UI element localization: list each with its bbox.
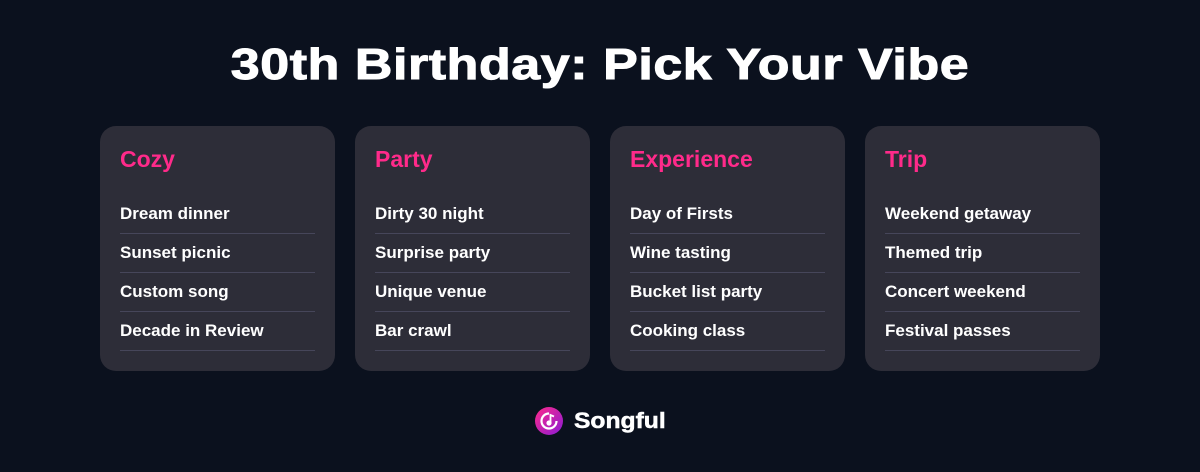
panel: experience: Wine tasting: [630, 243, 731, 262]
panel: cozy: Custom song: [120, 282, 229, 301]
title: 30th Birthday: Pick Your Vibe: [231, 40, 969, 89]
panel: cozy: Dream dinner: [120, 204, 230, 223]
panel: trip: Concert weekend: [885, 282, 1026, 301]
item list: trip: [885, 204, 1080, 351]
panel: cozy: Sunset picnic: [120, 243, 231, 262]
heading: trip: Trip: [885, 146, 927, 172]
panel: party: Dirty 30 night: [375, 204, 484, 223]
panel: trip: Themed trip: [885, 243, 982, 262]
heading: party: Party: [375, 146, 433, 172]
heading: cozy: Cozy: [120, 146, 175, 172]
panel: party: Surprise party: [375, 243, 490, 262]
panel: cozy: [100, 126, 335, 371]
item list: cozy: [120, 204, 315, 351]
panel: trip: Weekend getaway: [885, 204, 1031, 223]
panel: cozy: Decade in Review: [120, 321, 264, 340]
panel: trip: [865, 126, 1100, 371]
panel: party: [355, 126, 590, 371]
panel: experience: Cooking class: [630, 321, 745, 340]
item list: party: [375, 204, 570, 351]
panel: experience: Day of Firsts: [630, 204, 733, 223]
panel: experience: [610, 126, 845, 371]
panel: experience: Bucket list party: [630, 282, 762, 301]
brand name: Songful: [574, 408, 666, 433]
panel: party: Bar crawl: [375, 321, 452, 340]
item list: experience: [630, 204, 825, 351]
heading: experience: Experience: [630, 146, 753, 172]
panel: party: Unique venue: [375, 282, 486, 301]
icon: music note circle: [535, 407, 563, 435]
panel: trip: Festival passes: [885, 321, 1011, 340]
logo: Songful: [535, 407, 666, 435]
